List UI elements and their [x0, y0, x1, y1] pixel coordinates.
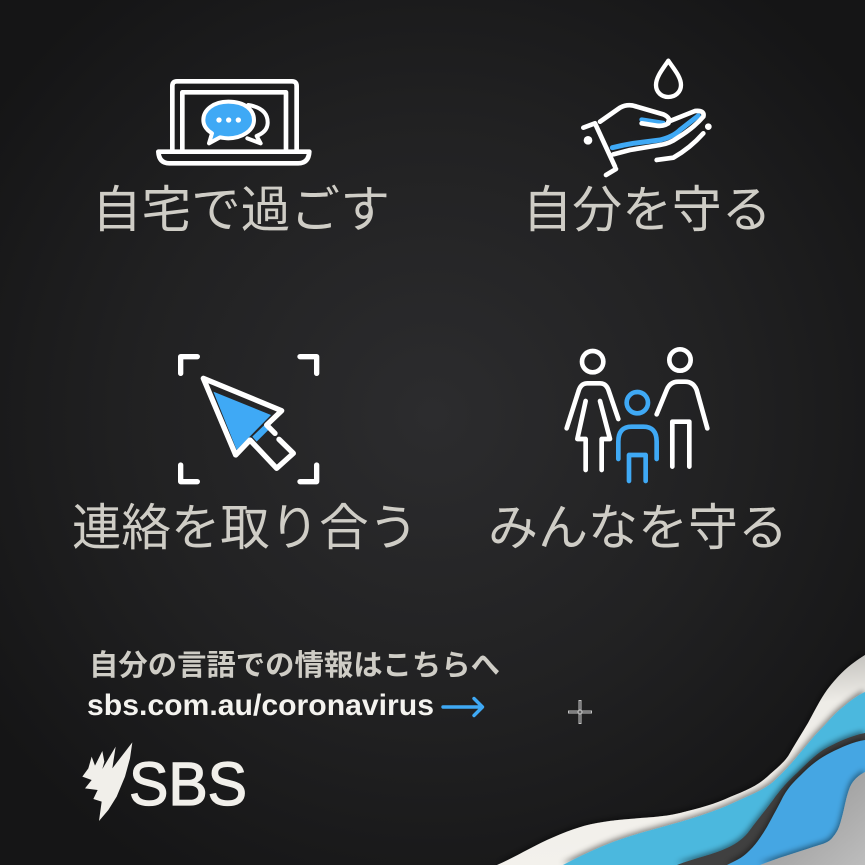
icon: hand — [583, 105, 712, 175]
arrow: to website — [443, 698, 482, 716]
logo mark — [82, 742, 132, 821]
heading: stay home: 自宅で過ごす — [92, 182, 390, 238]
crosshair mark — [568, 700, 592, 724]
heading: keep in touch: 連絡を取り合う — [72, 500, 418, 556]
wave: white layer — [497, 655, 865, 865]
icon: family — [567, 349, 707, 481]
heading: protect everyone: みんなを守る — [488, 500, 788, 556]
logo: SBS — [82, 742, 247, 821]
logo wordmark: SBS — [129, 750, 247, 818]
heading: protect yourself: 自分を守る — [522, 182, 772, 238]
icon: water drop — [656, 61, 681, 97]
icon: laptop with chat bubbles — [158, 81, 309, 163]
decorative paper waves — [497, 655, 865, 865]
text: information in your language: 自分の言語での情報はこちらへ — [89, 649, 500, 682]
wave: teal layer — [563, 692, 865, 865]
wave: grey layer — [760, 772, 865, 865]
icon: cursor in frame — [181, 357, 317, 482]
wave: dark layer — [677, 733, 865, 865]
text: website url: sbs.com.au/coronavirus — [87, 689, 434, 722]
wave: blue layer — [727, 740, 865, 865]
